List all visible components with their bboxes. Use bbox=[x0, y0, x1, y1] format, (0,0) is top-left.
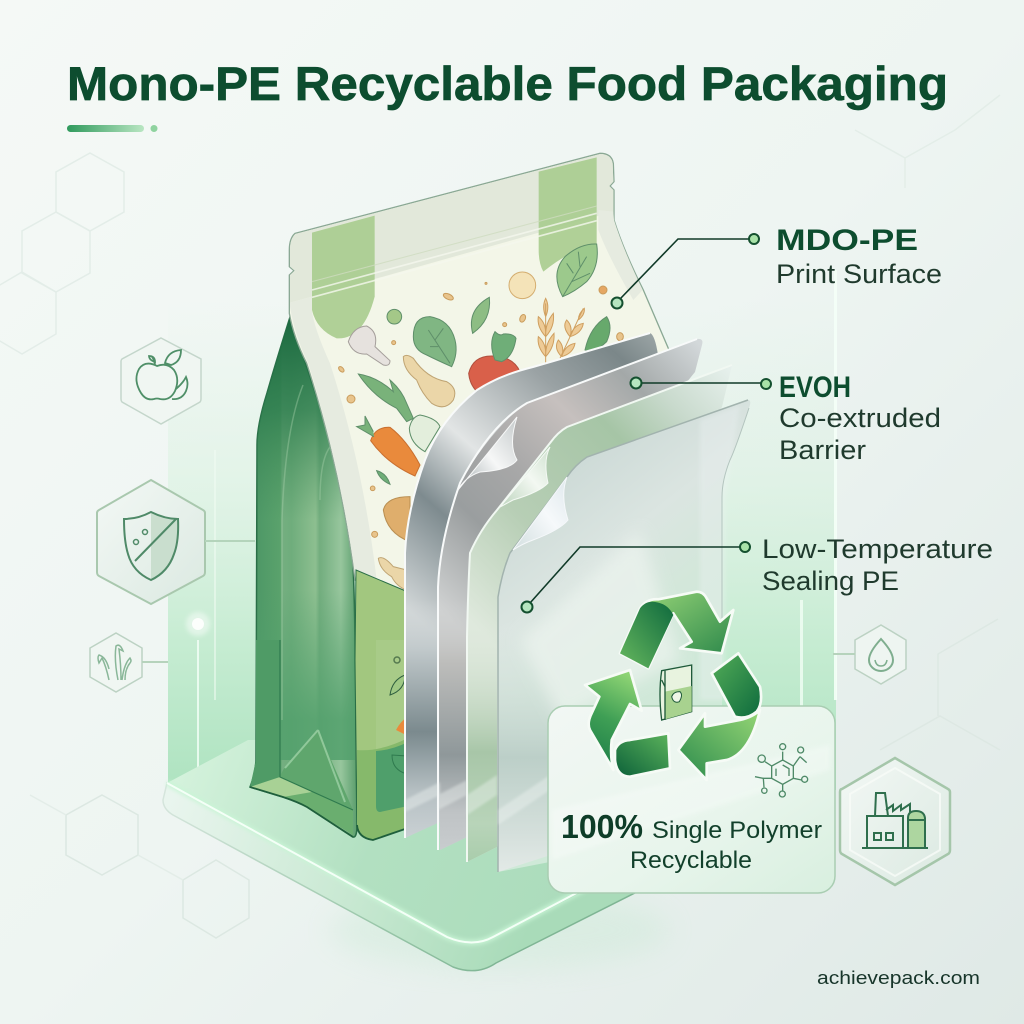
icon: factory hexagon bbox=[840, 758, 950, 885]
pouch side seams bbox=[290, 210, 643, 580]
panel text: 100% bbox=[561, 808, 643, 845]
pouch print stripes bbox=[312, 157, 597, 338]
food speckles bbox=[338, 282, 623, 537]
callout: MDO-PE: Print Surface bbox=[776, 259, 942, 289]
icon: sprout hexagon bbox=[90, 633, 168, 692]
food illustrations bbox=[348, 244, 610, 590]
peel highlight on barrier bbox=[500, 447, 550, 507]
callout: EVOH: EVOH bbox=[779, 371, 851, 404]
film layer: outer silver bbox=[405, 333, 658, 838]
callout: Low-Temperature Sealing PE: Low-Temperature bbox=[762, 534, 993, 564]
small pouch icon bbox=[660, 665, 692, 720]
title accent bar bbox=[67, 125, 158, 132]
film layer: barrier bbox=[467, 365, 732, 862]
film layer: sealing PE bbox=[498, 400, 750, 872]
pouch side gusset bbox=[250, 317, 357, 837]
pouch front face bbox=[289, 153, 683, 617]
callout: EVOH: Co-extruded bbox=[779, 403, 941, 433]
film layers bbox=[405, 333, 750, 872]
peel highlight on sealing layer bbox=[513, 477, 568, 550]
icon: water drop hexagon bbox=[833, 625, 906, 684]
website credit: achievepack.com bbox=[817, 967, 980, 988]
panel text: Recyclable bbox=[630, 847, 752, 874]
arrow: right bbox=[678, 653, 761, 780]
gusset floor bbox=[250, 640, 280, 787]
arrow: left bbox=[585, 670, 670, 777]
title: Mono-PE Recyclable Food Packaging bbox=[67, 57, 948, 110]
pouch top band bbox=[290, 154, 613, 303]
molecule icon bbox=[755, 744, 808, 797]
glass platform bbox=[163, 740, 835, 971]
callout: Low-Temperature Sealing PE: Sealing PE bbox=[762, 566, 899, 596]
peel highlight on silver bbox=[458, 417, 517, 490]
film layer: inner silver bbox=[438, 339, 702, 850]
panel text: Single Polymer bbox=[652, 817, 822, 844]
arrow: top bbox=[620, 592, 733, 668]
callout: MDO-PE: MDO-PE bbox=[776, 224, 918, 257]
recyclable panel bbox=[548, 592, 835, 893]
pouch zipper bbox=[312, 206, 597, 297]
glass back wall bbox=[168, 270, 837, 790]
layer bottom sheen bbox=[405, 775, 550, 825]
pouch lower print bbox=[355, 570, 408, 840]
icon: apple hexagon bbox=[121, 338, 201, 424]
callout: EVOH bbox=[630, 371, 941, 465]
panel text bbox=[561, 808, 822, 874]
recycling symbol bbox=[585, 592, 808, 797]
pouch bbox=[250, 153, 683, 840]
callout: Low-Temperature Sealing PE bbox=[522, 534, 993, 612]
callout: EVOH: Barrier bbox=[779, 435, 866, 465]
icon: shield hexagon bbox=[97, 480, 255, 604]
callout: MDO-PE bbox=[612, 224, 942, 308]
